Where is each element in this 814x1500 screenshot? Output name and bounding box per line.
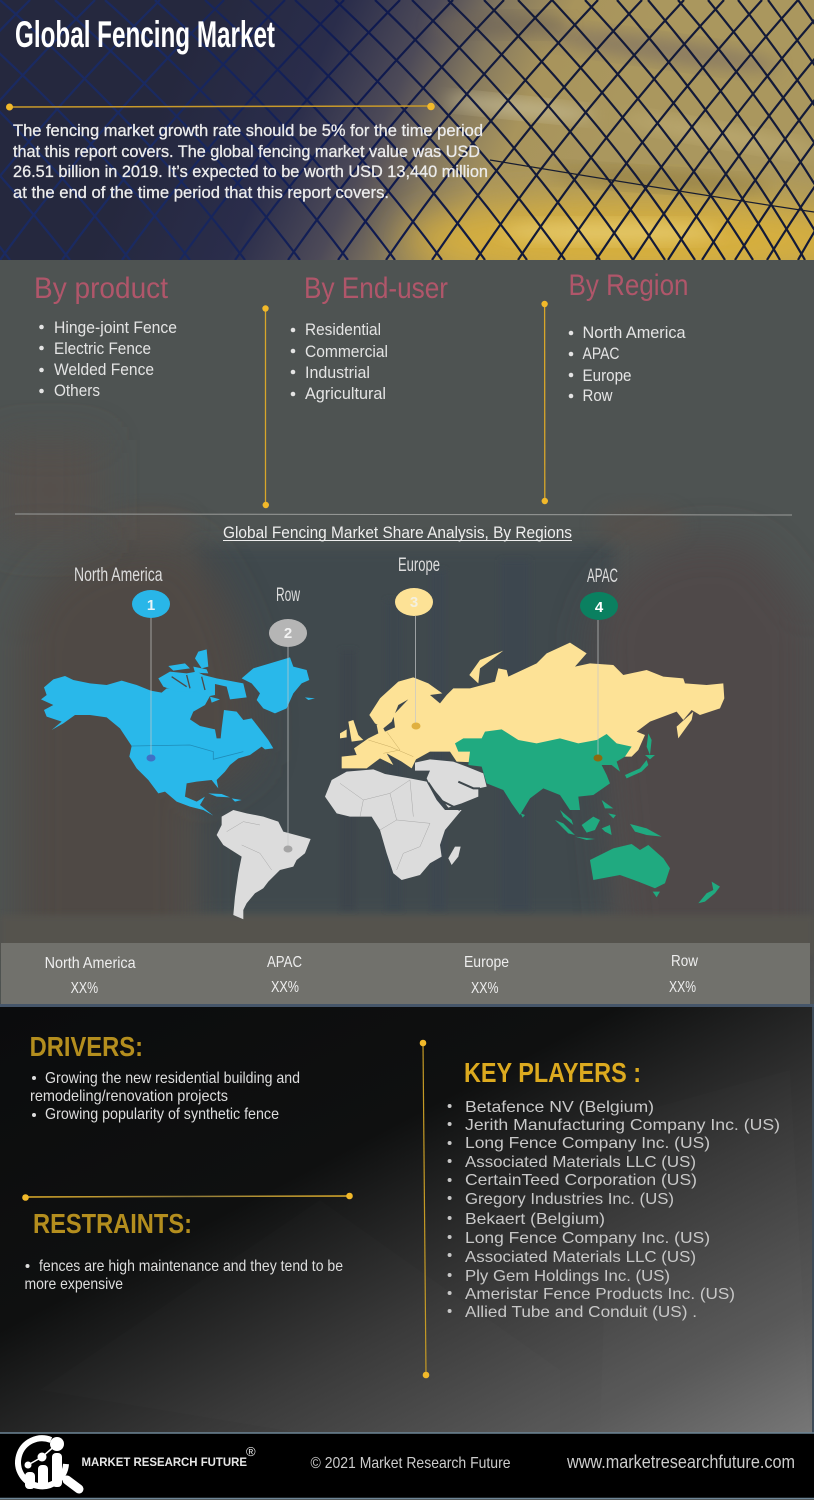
value: Europe: Europe xyxy=(464,954,509,971)
map pin: APAC: APAC xyxy=(587,566,618,587)
value: APAC xyxy=(267,954,302,996)
list: end-user types: Agricultural xyxy=(305,384,386,403)
map region: Asia Pacific xyxy=(455,729,720,903)
panel: header photo of chain-link fence xyxy=(0,0,814,282)
text block: market summary: The fencing market growth rate should be 5% for the time period xyxy=(13,121,483,140)
text block: market summary xyxy=(13,121,488,202)
list: key players: Associated Materials LLC (US) xyxy=(465,1249,696,1266)
list: restraints xyxy=(24,1258,343,1293)
map pin: Europe xyxy=(395,555,440,730)
list: restraints: fences are high maintenance and they tend to be xyxy=(39,1258,343,1275)
list: key players: CertainTeed Corporation (US) xyxy=(465,1172,697,1189)
heading: by end-user: By End-user xyxy=(304,272,448,305)
list: product types xyxy=(39,318,177,400)
map region: South America xyxy=(217,810,311,919)
chart: world map by region xyxy=(41,643,724,919)
list: key players: Ply Gem Holdings Inc. (US) xyxy=(465,1268,670,1285)
value: Row: Row xyxy=(671,953,698,970)
heading: by product: By product xyxy=(34,272,169,305)
heading: restraints: RESTRAINTS: xyxy=(33,1208,192,1239)
value: APAC: XX% xyxy=(271,979,299,996)
list: key players: Ameristar Fence Products Inc. (US) xyxy=(465,1286,735,1303)
value: North America: XX% xyxy=(71,980,98,997)
list: product types: Hinge-joint Fence xyxy=(54,318,177,337)
list: drivers: Growing popularity of synthetic fence xyxy=(45,1106,279,1123)
value: North America: North America xyxy=(45,955,136,972)
icon: market research future logo xyxy=(18,1437,79,1489)
list: end-user types: Commercial xyxy=(305,342,388,361)
list: product types: Others xyxy=(54,381,100,400)
value: Europe xyxy=(464,954,509,997)
list: drivers: Growing the new residential building and xyxy=(45,1070,300,1087)
list: regions: Europe xyxy=(582,366,632,385)
list: end-user types xyxy=(291,320,388,403)
divider: second vertical gold line xyxy=(541,301,548,504)
list: regions: North America xyxy=(582,323,686,342)
list: regions xyxy=(569,323,686,405)
map pin: Row xyxy=(269,585,307,852)
panel: drivers, restraints and key players background xyxy=(0,1007,814,1433)
map pin: Row: 2 xyxy=(284,625,292,642)
list: regions: APAC xyxy=(582,344,620,363)
heading: by region: By Region xyxy=(568,269,688,302)
heading: market share analysis: Global Fencing Market Share Analysis, By Regions xyxy=(223,523,572,542)
panel: by product xyxy=(34,272,177,400)
panel: share values bar xyxy=(1,943,810,1004)
list: end-user types: Residential xyxy=(305,320,381,339)
list: drivers: remodeling/renovation projects xyxy=(30,1088,228,1105)
map pin: Europe: Europe xyxy=(398,555,440,576)
list: regions: Row xyxy=(582,386,613,405)
text: copyright: © 2021 Market Research Future xyxy=(310,1455,511,1472)
text block: restraints xyxy=(24,1208,343,1293)
text block: drivers xyxy=(30,1031,300,1123)
map pin: Europe: 3 xyxy=(410,594,418,611)
list: key players xyxy=(448,1099,780,1321)
text block: market summary: that this report covers. The global fencing market value was USD xyxy=(13,142,480,161)
divider: first vertical gold line xyxy=(262,305,269,508)
heading: Global Fencing Market: Global Fencing Market xyxy=(15,14,275,55)
list: key players: Jerith Manufacturing Company Inc. (US) xyxy=(465,1117,780,1134)
list: key players: Betafence NV (Belgium) xyxy=(465,1099,654,1116)
map pin: North America: 1 xyxy=(147,597,155,614)
heading: drivers: DRIVERS: xyxy=(30,1031,143,1062)
list: drivers xyxy=(30,1070,300,1123)
map region: Europe and Russia xyxy=(340,643,724,768)
divider: restraints gold line xyxy=(22,1193,353,1201)
list: restraints: more expensive xyxy=(24,1276,123,1293)
list: product types: Welded Fence xyxy=(54,360,154,379)
list: key players: Long Fence Company Inc. (US) xyxy=(465,1135,710,1152)
value: Row: XX% xyxy=(669,979,696,996)
map pin: North America: North America xyxy=(74,565,163,586)
map pin: Row: Row xyxy=(276,585,300,606)
map pin: North America xyxy=(74,565,170,762)
value: Row xyxy=(669,953,698,996)
value: APAC: APAC xyxy=(267,954,302,971)
text block: market summary: at the end of the time period that this report covers. xyxy=(13,183,389,202)
divider: key players vertical gold line xyxy=(420,1040,429,1378)
heading: key players: KEY PLAYERS : xyxy=(464,1057,641,1088)
map region: North America xyxy=(41,649,315,816)
text block: market summary: 26.51 billion in 2019. It’s expected to be worth USD 13,440 million xyxy=(13,162,488,181)
map region: Africa and Middle East xyxy=(325,759,487,880)
map pin: APAC: 4 xyxy=(595,599,604,616)
panel: by end-user xyxy=(291,272,448,403)
list: key players: Bekaert (Belgium) xyxy=(465,1211,605,1228)
list: end-user types: Industrial xyxy=(305,363,370,382)
panel: blurred hands and chart background xyxy=(4,456,810,950)
map pin: APAC xyxy=(580,566,618,762)
panel: footer xyxy=(0,1433,814,1498)
text: website: www.marketresearchfuture.com xyxy=(566,1452,795,1472)
list: key players: Allied Tube and Conduit (US) . xyxy=(465,1304,697,1321)
text: registered mark: ® xyxy=(246,1444,256,1459)
list: key players: Long Fence Company Inc. (US) xyxy=(465,1230,710,1247)
panel: by region xyxy=(568,269,688,405)
list: key players: Associated Materials LLC (US) xyxy=(465,1154,696,1171)
list: product types: Electric Fence xyxy=(54,339,151,358)
text block: key players xyxy=(448,1057,780,1321)
list: key players: Gregory Industries Inc. (US) xyxy=(465,1191,674,1208)
value: Europe: XX% xyxy=(471,980,498,997)
text: brand name: MARKET RESEARCH FUTURE xyxy=(82,1455,247,1469)
divider: header gold line with dots xyxy=(6,103,435,110)
value: North America xyxy=(45,955,136,997)
